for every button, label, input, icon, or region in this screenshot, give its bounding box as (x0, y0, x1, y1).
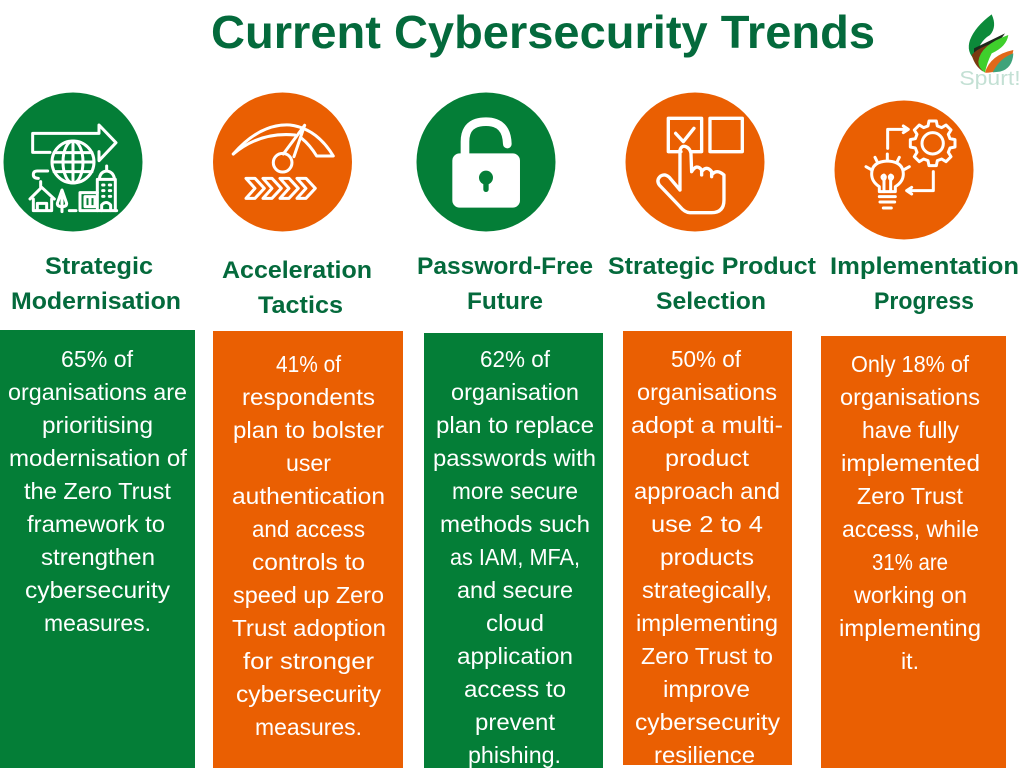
icon: idea and gear process (834, 100, 974, 240)
heading: Acceleration Tactics: Tactics (258, 292, 343, 319)
panel: strategic product selection: cybersecurity (635, 709, 781, 735)
panel: implementation progress: 31% are (872, 549, 948, 575)
panel: strategic modernisation: measures. (44, 610, 151, 636)
panel: strategic product selection: 50% of (671, 346, 742, 372)
panel: password-free future: application (457, 643, 573, 669)
panel: password-free future: methods such (440, 511, 590, 537)
icon: modernisation globe and city (4, 92, 142, 232)
panel: strategic product selection: improve (663, 676, 750, 702)
panel: password-free future: and secure (457, 577, 573, 603)
panel: acceleration tactics: speed up Zero (233, 582, 384, 608)
panel: implementation progress: implementing (839, 615, 981, 641)
panel: strategic product selection: strategically, (642, 577, 772, 603)
panel: implementation progress: it. (901, 648, 919, 674)
panel: strategic modernisation: organisations are (8, 379, 187, 405)
panel: password-free future: organisation (451, 379, 579, 405)
icon: speedometer and chevrons (213, 92, 352, 232)
panel: acceleration tactics: plan to bolster (233, 417, 384, 443)
panel: strategic product selection: approach and (634, 478, 780, 504)
heading: Strategic Product Selection: Strategic Product (608, 253, 816, 280)
panel: strategic product selection: use 2 to 4 (651, 511, 763, 537)
logo: Spurt!: Spurt! (959, 67, 1021, 90)
panel: strategic modernisation (0, 330, 195, 768)
heading: Strategic Modernisation: Modernisation (11, 288, 181, 315)
panel: acceleration tactics: user (286, 450, 331, 476)
panel: implementation progress (821, 336, 1006, 768)
panel: acceleration tactics: respondents (242, 384, 375, 410)
panel: strategic modernisation: cybersecurity (25, 577, 171, 603)
panel: strategic product selection: resilience (654, 742, 755, 768)
heading: Acceleration Tactics: Acceleration (222, 257, 372, 284)
panel: strategic product selection (623, 331, 792, 768)
heading: Password-Free Future (417, 253, 593, 315)
panel: strategic product selection: organisations (637, 379, 777, 405)
panel: strategic modernisation: the Zero Trust (24, 478, 172, 504)
panel: password-free future: plan to replace (436, 412, 594, 438)
panel: implementation progress: have fully (862, 417, 959, 443)
panel: password-free future: cloud (486, 610, 544, 636)
heading: Password-Free Future: Future (467, 288, 543, 315)
panel: password-free future: 62% of (480, 346, 551, 372)
icon: hand selecting checkbox (626, 92, 764, 232)
heading: Strategic Product Selection: Selection (656, 288, 766, 315)
panel: strategic product selection: implementing (636, 610, 778, 636)
panel: acceleration tactics: cybersecurity (236, 681, 382, 707)
panel: acceleration tactics: Trust adoption (232, 615, 386, 641)
heading: Strategic Modernisation: Strategic (45, 253, 153, 280)
panel: implementation progress: Only 18% of (851, 351, 970, 377)
panel: strategic product selection: adopt a multi- (631, 412, 783, 438)
heading: Acceleration Tactics (222, 257, 372, 319)
title: Current Cybersecurity Trends (211, 6, 875, 58)
panel: password-free future: more secure (452, 478, 578, 504)
heading: Implementation Progress: Implementation (830, 253, 1019, 280)
panel: strategic product selection: product (665, 445, 750, 471)
panel: acceleration tactics: authentication (232, 483, 385, 509)
heading: Strategic Product Selection (608, 253, 816, 315)
icon: open padlock (416, 92, 556, 232)
panel: acceleration tactics: for stronger (243, 648, 374, 674)
panel: implementation progress: Zero Trust (857, 483, 964, 509)
heading: Password-Free Future: Password-Free (417, 253, 593, 280)
panel: password-free future: prevent (475, 709, 556, 735)
panel: strategic modernisation: 65% of (61, 346, 134, 372)
panel: strategic modernisation: modernisation of (9, 445, 188, 471)
panel: implementation progress: organisations (840, 384, 980, 410)
panel: strategic modernisation: framework to (27, 511, 165, 537)
panel: strategic modernisation: prioritising (42, 412, 153, 438)
panel: acceleration tactics: measures. (255, 714, 362, 740)
panel: acceleration tactics: and access (252, 516, 365, 542)
heading: Implementation Progress (830, 253, 1019, 315)
heading: Implementation Progress: Progress (874, 288, 974, 315)
panel: strategic modernisation: strengthen (41, 544, 155, 570)
panel: password-free future: phishing. (468, 742, 561, 768)
heading: Strategic Modernisation (11, 253, 181, 315)
panel: strategic product selection: products (660, 544, 754, 570)
panel: implementation progress: implemented (841, 450, 980, 476)
panel: password-free future: access to (464, 676, 566, 702)
panel: password-free future: passwords with (433, 445, 596, 471)
logo: Spurt! (959, 14, 1021, 90)
panel: acceleration tactics: controls to (252, 549, 365, 575)
panel: acceleration tactics: 41% of (276, 351, 342, 377)
panel: acceleration tactics (213, 331, 403, 768)
panel: implementation progress: working on (853, 582, 967, 608)
panel: password-free future (424, 333, 603, 768)
panel: implementation progress: access, while (842, 516, 979, 542)
panel: strategic product selection: Zero Trust to (641, 643, 773, 669)
panel: password-free future: as IAM, MFA, (450, 544, 580, 570)
